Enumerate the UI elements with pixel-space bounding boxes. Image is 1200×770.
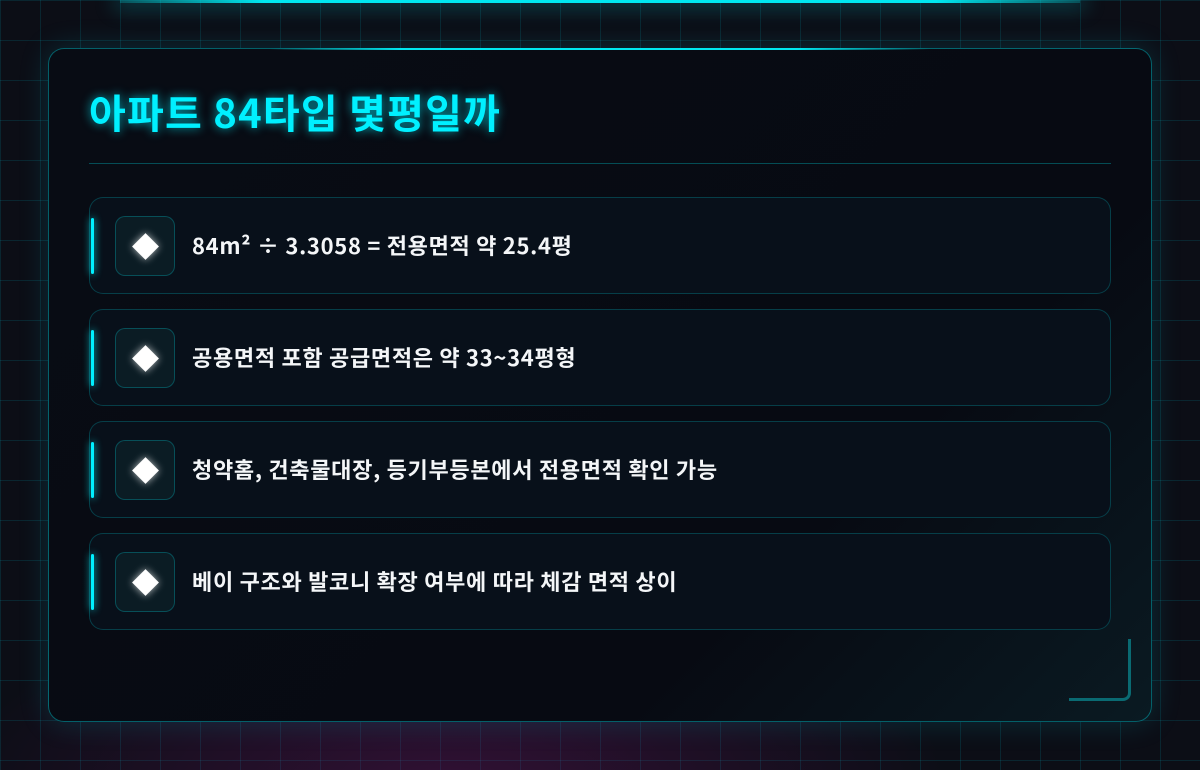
title: 아파트 84타입 몇평일까 — [89, 82, 501, 140]
corner bracket — [1069, 639, 1131, 701]
item 3 — [89, 421, 1111, 518]
text 3: 청약홈, 건축물대장, 등기부등본에서 전용면적 확인 가능 — [192, 453, 718, 485]
text 4: 베이 구조와 발코니 확장 여부에 따라 체감 면적 상이 — [192, 565, 677, 597]
item 2 — [89, 309, 1111, 406]
text 1: 84m² ÷ 3.3058 = 전용면적 약 25.4평 — [192, 229, 573, 261]
icon: diamond — [115, 328, 175, 388]
text 2: 공용면적 포함 공급면적은 약 33~34평형 — [192, 341, 576, 373]
icon: diamond — [115, 440, 175, 500]
icon: diamond — [115, 552, 175, 612]
item 1 — [89, 197, 1111, 294]
icon: diamond — [115, 216, 175, 276]
item 4 — [89, 533, 1111, 630]
